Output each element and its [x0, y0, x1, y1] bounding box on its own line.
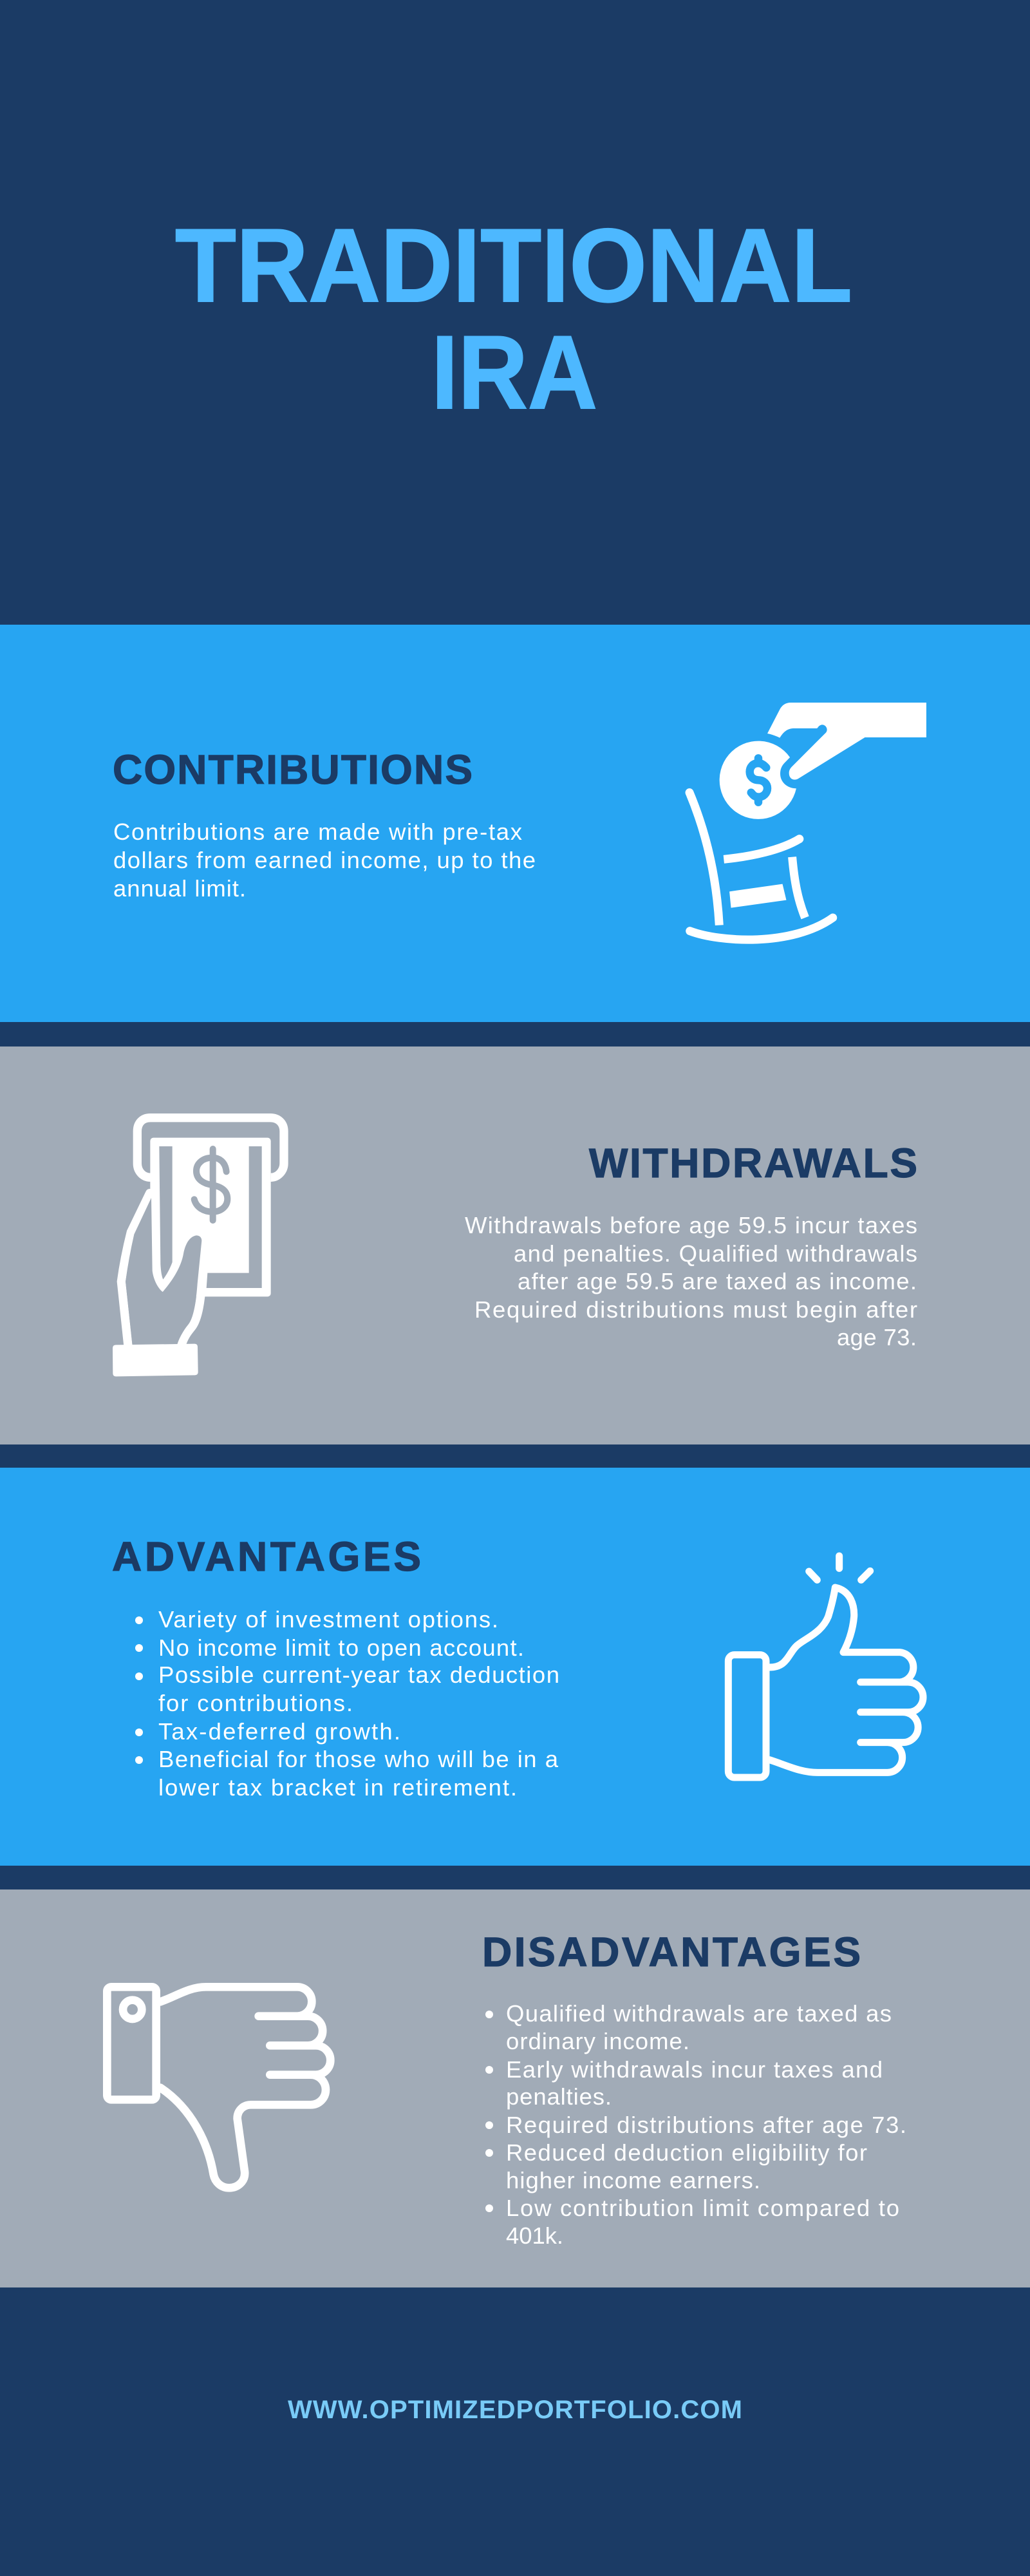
panel: advantages: [0, 1468, 1030, 1866]
icon part: cuff: [728, 1655, 766, 1777]
list: disadvantages: Early withdrawals incur taxes and: [506, 2056, 883, 2083]
text block: contributions: Contributions are made with pre-tax: [113, 819, 522, 845]
text block: withdrawals: Required distributions must begin after: [474, 1296, 917, 1323]
heading: contributions: CONTRIBUTIONS: [113, 746, 473, 793]
icon part: cuff button: [123, 2000, 142, 2019]
list: advantages: Tax-deferred growth.: [158, 1718, 400, 1745]
icon: hand dropping coin into rocking chair: [689, 703, 926, 940]
icon: thumbs up: [728, 1556, 923, 1777]
icon part: hand fill: [126, 1198, 201, 1345]
list: disadvantages: Required distributions after age 73.: [506, 2112, 906, 2138]
title: [175, 207, 852, 431]
icon part: coin: [720, 741, 796, 819]
icon part: banknote cut-outs: [159, 1146, 262, 1288]
icon part: hand outline: [121, 1193, 201, 1346]
text block: withdrawals: and penalties. Qualified withdrawals: [514, 1240, 917, 1267]
footer: website: WWW.OPTIMIZEDPORTFOLIO.COM: [288, 2396, 742, 2424]
icon part: ATM slot: [137, 1118, 284, 1177]
text block: withdrawals: after age 59.5 are taxed as income.: [518, 1268, 917, 1294]
icon part: banknote: [150, 1138, 271, 1296]
list: advantages: Variety of investment options.: [158, 1606, 498, 1633]
list: advantages: lower tax bracket in retirement.: [158, 1774, 517, 1801]
panel: disadvantages: [0, 1889, 1030, 2287]
list: advantages: Possible current-year tax deduction: [158, 1662, 559, 1688]
heading: disadvantages: DISADVANTAGES: [482, 1929, 861, 1975]
text block: withdrawals: Withdrawals before age 59.5 incur taxes: [465, 1212, 917, 1238]
title: IRA: [431, 314, 597, 431]
icon part: sparkle lines: [809, 1556, 870, 1580]
panel: withdrawals: [0, 1046, 1030, 1444]
list: disadvantages: Qualified withdrawals are taxed as: [506, 2000, 892, 2027]
list: disadvantages: 401k.: [506, 2222, 563, 2249]
heading: advantages: ADVANTAGES: [112, 1533, 421, 1580]
list: disadvantages: higher income earners.: [506, 2167, 760, 2193]
list: advantages: No income limit to open account.: [158, 1634, 524, 1661]
icon part: hand: [767, 703, 926, 780]
list: disadvantages: penalties.: [506, 2083, 612, 2110]
icon part: cuff: [107, 1987, 156, 2099]
list: advantages: Beneficial for those who will be in a: [158, 1746, 559, 1772]
icon: thumbs down: [107, 1987, 330, 2188]
icon part: rocking chair: [689, 793, 833, 940]
icon part: dollar sign on banknote: [194, 1149, 227, 1220]
list: disadvantages: [485, 2000, 906, 2249]
icon part: hand: [769, 1587, 923, 1772]
icon part: dollar sign on coin: [750, 758, 767, 802]
list: disadvantages: Low contribution limit compared to: [506, 2195, 899, 2221]
icon part: cuff: [113, 1344, 198, 1376]
text block: contributions: [113, 819, 536, 902]
list: advantages: [135, 1606, 559, 1801]
text block: contributions: dollars from earned income, up to the: [113, 847, 536, 873]
title: TRADITIONAL: [175, 207, 852, 324]
icon part: hand: [160, 1987, 330, 2188]
panel: contributions: [0, 625, 1030, 1022]
list: advantages: for contributions.: [158, 1690, 353, 1716]
icon: hand taking cash from ATM: [113, 1118, 284, 1376]
text block: withdrawals: age 73.: [837, 1324, 917, 1350]
text block: contributions: annual limit.: [113, 875, 246, 902]
heading: withdrawals: WITHDRAWALS: [589, 1140, 917, 1186]
text block: withdrawals: [465, 1212, 917, 1350]
list: disadvantages: Reduced deduction eligibility for: [506, 2139, 867, 2166]
list: disadvantages: ordinary income.: [506, 2028, 689, 2054]
